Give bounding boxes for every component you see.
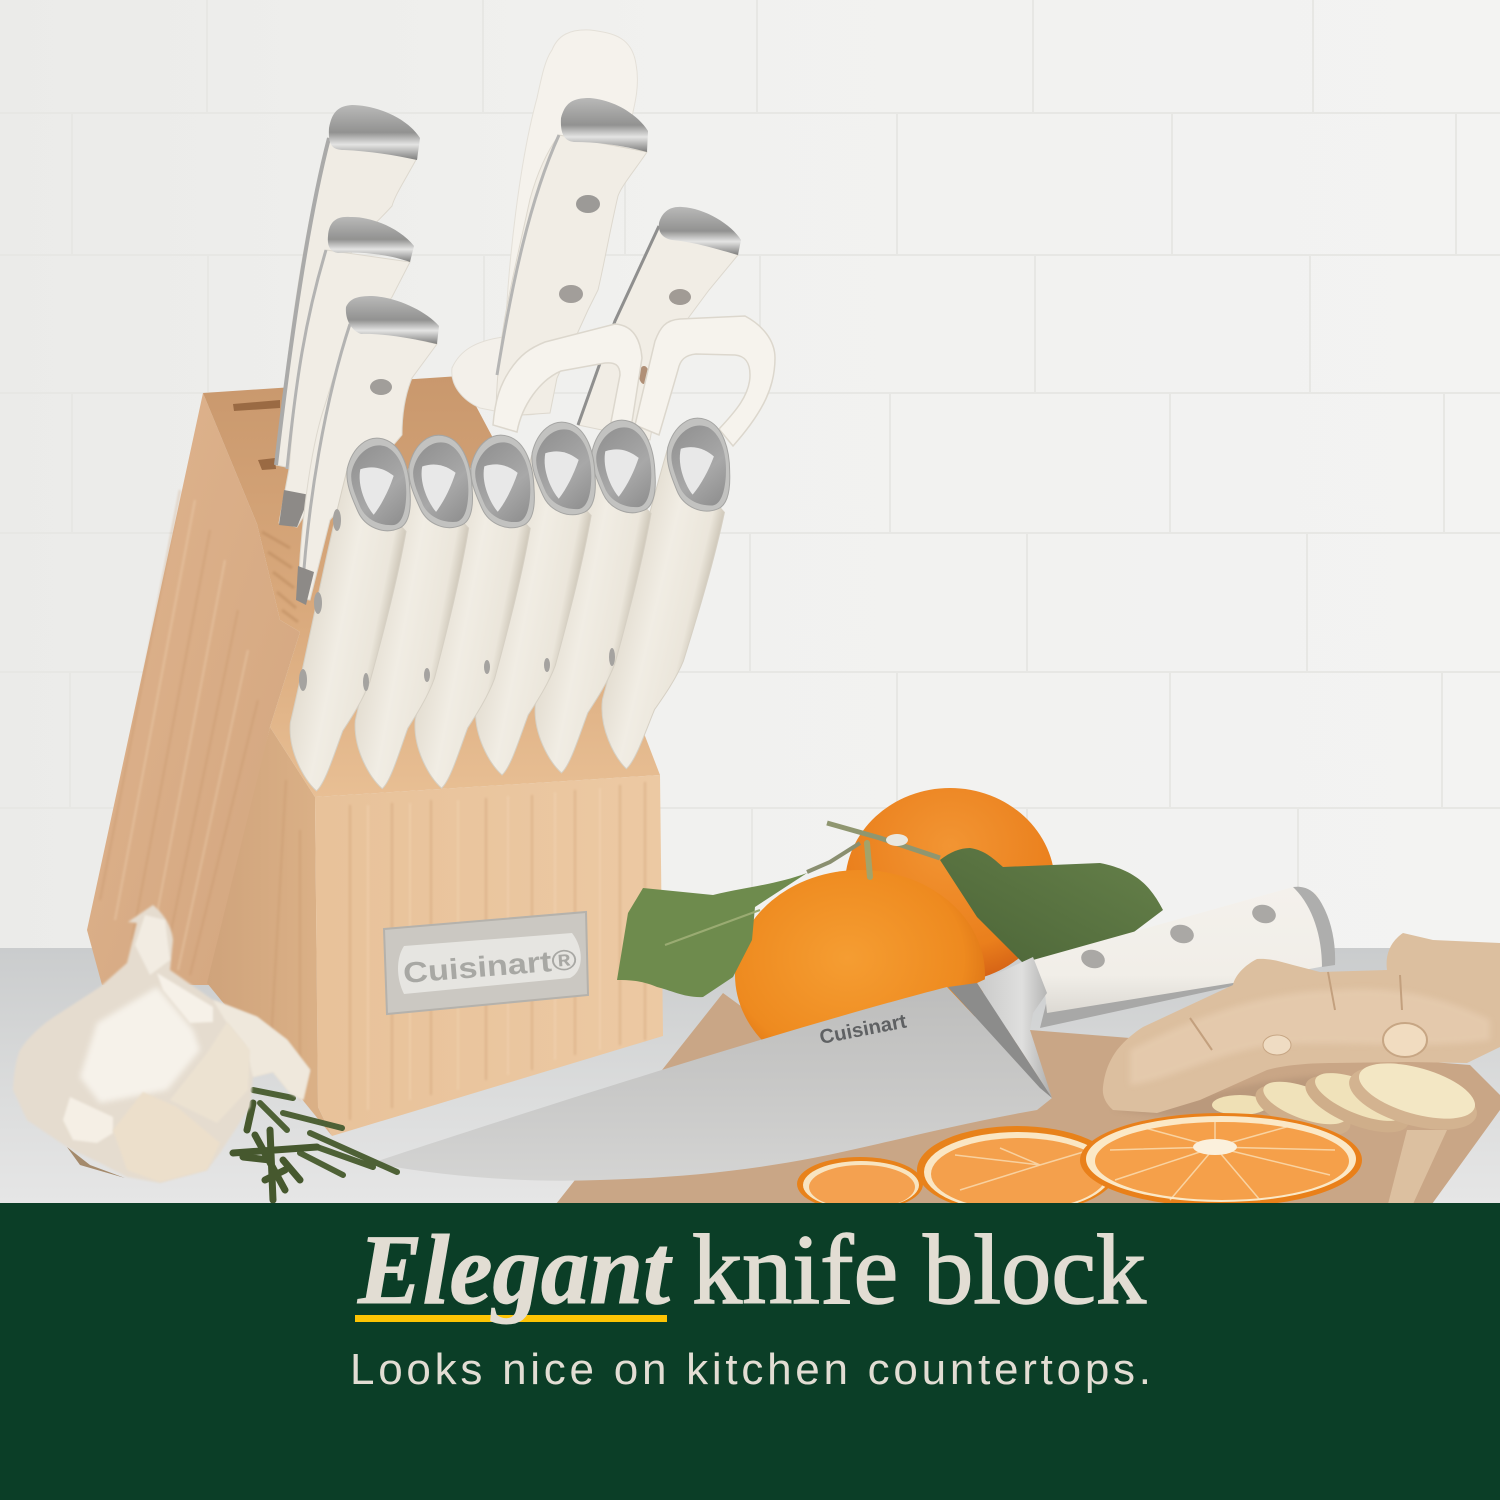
left leaf and stems [617,823,940,997]
shears loop right [635,316,775,446]
wood grain [100,490,645,1120]
large knives in block [276,30,741,605]
blade [372,987,1052,1181]
heading [357,1214,1146,1325]
knife handle back left [276,105,420,470]
yellow underline [355,1315,667,1322]
block front face [315,775,663,1136]
slice right [1080,1113,1362,1207]
heading emphasis: Elegant: Elegant [357,1214,673,1325]
brand plate: Cuisinart: Cuisinart® [402,944,578,990]
knife handle right [578,207,741,440]
slots [233,400,280,470]
shears loop left [493,324,642,432]
countertop [0,948,1500,1204]
knife block [87,376,663,1136]
bottom green band [0,1203,1500,1500]
clove front [113,1092,220,1182]
orange slices [797,1113,1362,1214]
right leaf [940,848,1163,970]
bolster [977,957,1052,1098]
rosemary [233,1090,397,1200]
ginger root [1103,933,1500,1146]
white handle [1033,887,1335,1013]
blade logo: Cuisinart [818,1010,909,1049]
handle butt [1293,887,1335,967]
steak knives row [278,411,744,798]
block left side [87,393,300,985]
knife handle front left [296,296,439,605]
slice left [797,1157,923,1211]
subheading: Looks nice on kitchen countertops. [350,1345,1151,1394]
cutting board [556,993,1500,1204]
heading rest: knife block: knife block [692,1214,1146,1325]
background: white tile wall [0,0,1500,950]
block lower side [207,727,332,1136]
garlic [13,905,310,1183]
slice middle [917,1126,1117,1214]
knife handle centre [496,98,648,415]
knife handle middle left [279,217,414,527]
brand plate: Cuisinart [384,912,588,1014]
front orange [735,843,985,1080]
clove left low [63,1097,113,1143]
chef's knife [372,887,1335,1181]
kitchen shears [493,316,775,446]
block angled top with slots [203,376,660,797]
back orange [845,788,1055,982]
white sharpener handle [452,30,637,415]
clove right [170,1022,250,1123]
tang strip [1040,950,1320,1028]
